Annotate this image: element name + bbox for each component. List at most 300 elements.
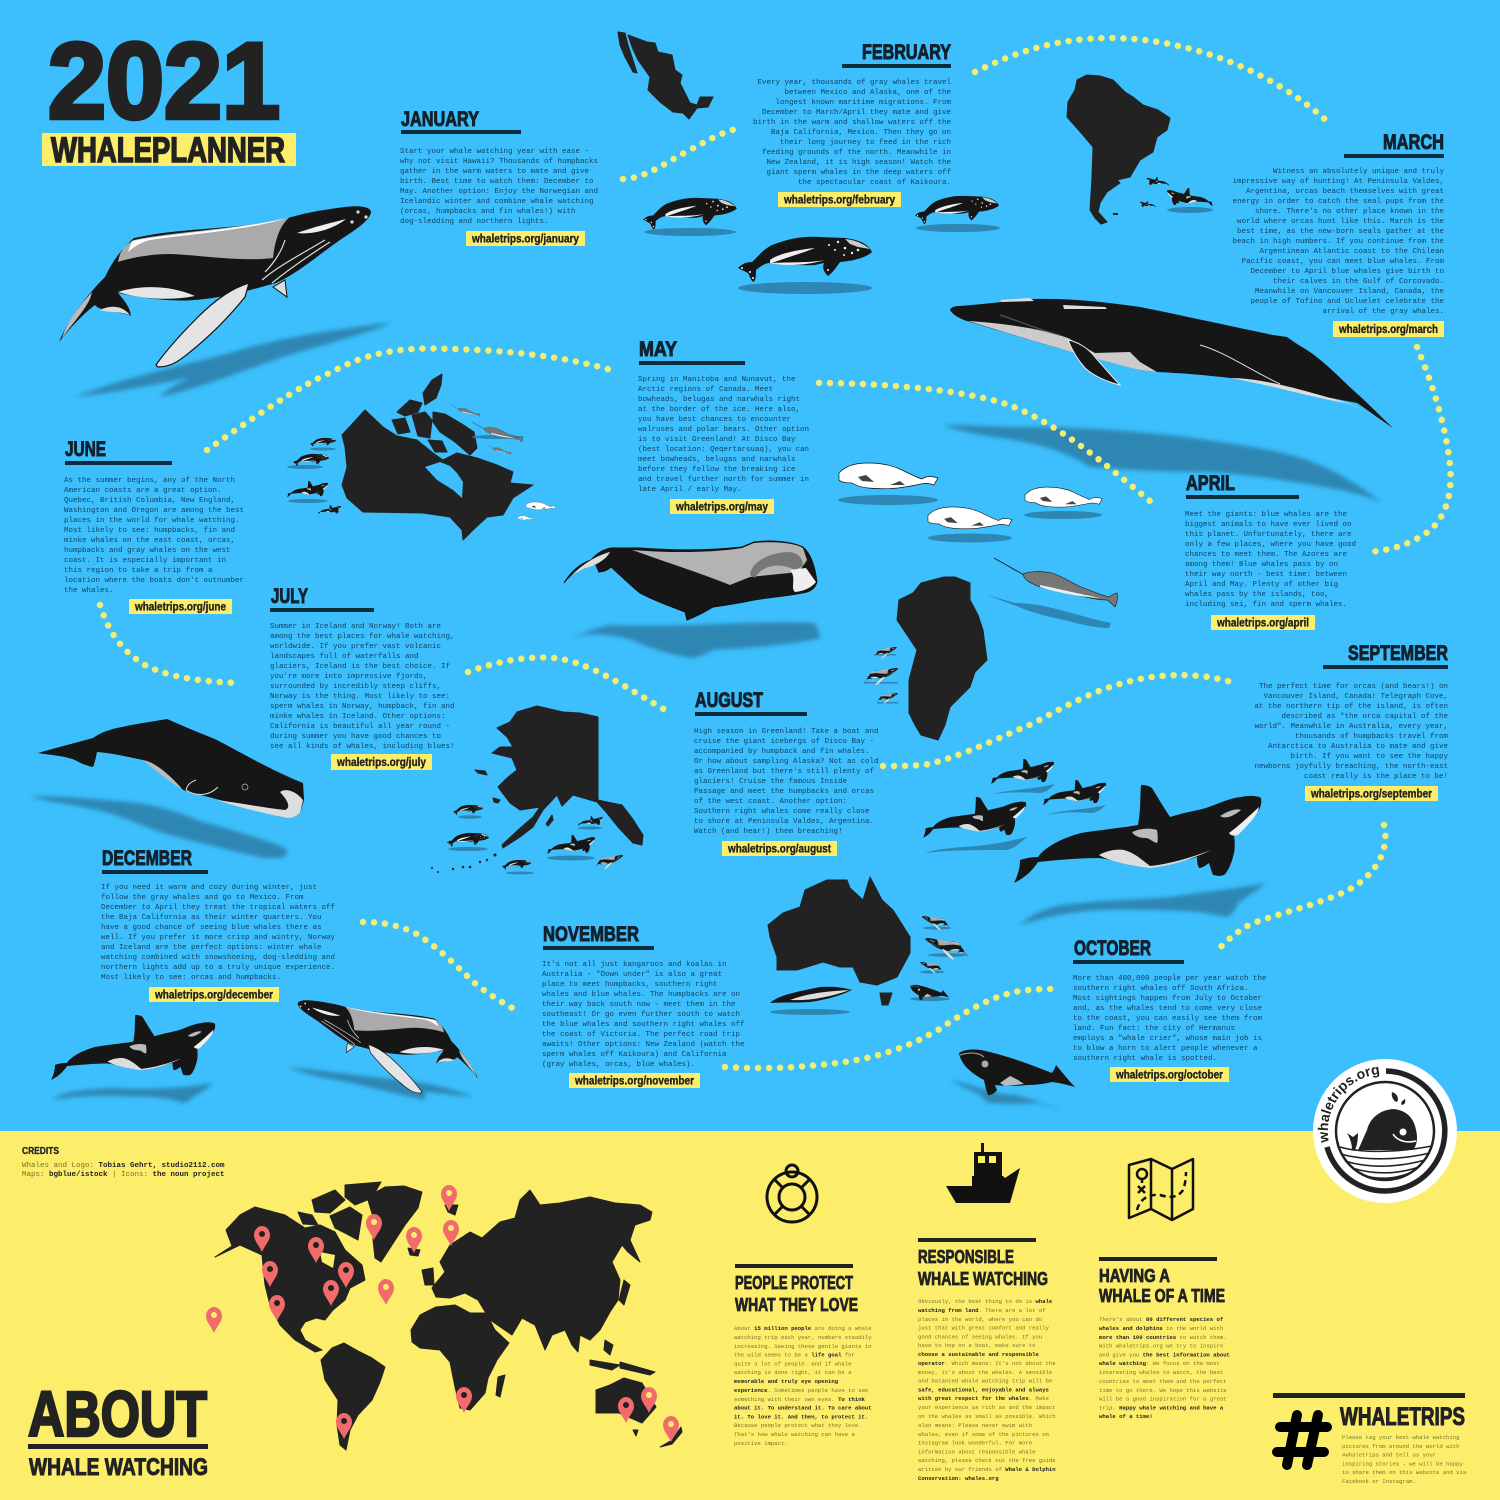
text: February: Baja California, Mexico. Then they go on [771,129,951,137]
body text: interesting whales to watch, the best [1099,1369,1223,1376]
North America [215,1207,365,1352]
text: June: the whales. [64,587,114,595]
map: Canada with whales [287,374,556,540]
text: April: their way north - best time: between [1185,571,1347,579]
text: May [638,376,809,494]
text: September: Antarctica to Australia to mate and give [1268,743,1448,751]
mainland [628,35,713,119]
white disc [1313,1059,1457,1203]
body text: inspiring stories - we will be happy [1342,1460,1463,1468]
small blue whale [770,987,852,1003]
text: September: newborns joyfully breaching, the north-east [1254,763,1448,771]
text: November: whales and blue whales. The humpbacks are on [542,991,740,999]
white jaw [790,568,816,592]
body text: That's how whale watching can have a [734,1431,855,1438]
text: January: gather in the warm waters to mate and give [400,168,589,176]
body text: quite a lot of people. And if whale [734,1360,852,1368]
text: January: Icelandic winter and combine whale watching [400,198,594,206]
text: November: their way back south now - meet them in the [542,1001,736,1009]
shadow [943,425,1383,503]
text: January [400,148,598,226]
gray whale bottom [502,860,531,870]
New Zealand [660,1427,682,1447]
text: February: longest known maritime migrations. From [775,99,951,107]
body text: information about responsible whale [918,1448,1036,1456]
text: December: watching combined with snowshoeing, dog-sledding and [101,954,335,962]
Hudson Bay [425,462,463,498]
text: August: Watch (and hear!) them breaching! [694,828,843,836]
orca small left [991,759,1054,784]
shadow [30,797,287,858]
orca small [1147,177,1169,186]
heading: November: NOVEMBER [543,923,639,946]
text: October: More than 400,000 people per year watch the [1073,975,1267,983]
humpback 2 [864,668,898,686]
body text: money, it's about the whales. A sensible [918,1369,1052,1376]
body text: Because people protect what they love. [734,1422,862,1429]
link: April: whaletrips.org/april [1216,618,1309,630]
link: March [1333,321,1444,337]
link: December: whaletrips.org/december [154,990,273,1002]
text: February: the spectacular coast of Kaikoura. [798,179,951,187]
body text: #whaletrips and tell us your [1342,1452,1436,1458]
curved logo text: whaletrips.org [1318,1066,1380,1143]
Iceland [408,1248,420,1256]
mainland [768,877,910,985]
text: May: (best location: Qeqertarsuaq), you can [638,446,809,454]
heading: February: FEBRUARY [862,41,951,64]
Svalbard [445,1205,458,1215]
text: August: glaciers! Cruise the famous Inside [694,778,847,786]
text: February: Every year, thousands of gray whales travel [757,79,951,87]
body text: to share them on this website and via [1342,1469,1467,1476]
text: April: Meet the giants: blue whales are the [1185,511,1347,519]
shadows [1020,883,1266,925]
heading: October: OCTOBER [1074,937,1151,960]
text: February: feeding grounds of the north. Meanwhile in [762,149,951,157]
gray back [632,542,807,585]
text: March: world where orcas hunt like this. March is the [1237,218,1444,226]
subtitle banner background [42,133,296,166]
text: July: Norway is the thing. Most likely to see: [270,693,450,701]
text: May: walruses and polar bears. Other option [638,426,809,434]
body text: watching from land. There are a lot of [918,1307,1046,1314]
text: December: have a good chance of seeing blue whales there as [101,924,322,932]
inner ring [1336,1082,1434,1180]
body text: time to go there. We hope this website [1099,1387,1227,1394]
body text: the wild seems to be a life goal for [734,1352,855,1358]
shadow [75,322,393,397]
panel: October [1073,937,1267,1082]
orca with shadow (December) [51,1015,215,1103]
text: May: is to visit Greenland! At Disco Bay [638,436,796,444]
body text: choose a sustainable and responsible [918,1351,1039,1358]
Eurasia [432,1190,652,1352]
link: October: whaletrips.org/october [1115,1070,1223,1082]
text: February [753,79,951,187]
orca tiny [1140,201,1156,207]
body text: with great respect for the whales. Make [918,1395,1049,1402]
heading [918,1247,1048,1289]
route: March to April [1370,347,1451,552]
whale [959,1049,1075,1095]
southern right whale with shadow (October) [950,1049,1075,1113]
Indonesia and Philippines [590,1340,655,1375]
baleen [750,552,803,578]
text: February: birth in the warm and shallow waters off the [753,119,951,127]
text: March: Argentinean Atlantic coast to the Chilean [1259,248,1444,256]
Australia [596,1378,656,1423]
link: August: whaletrips.org/august [727,844,831,856]
narwhal with shadow (May) [987,558,1117,628]
humpback 1 [874,647,897,659]
text: March: impressive way of hunting! At Peninsula Valdes, [1232,178,1444,186]
Victoria Island [392,418,410,434]
Ellesmere Island [423,374,442,405]
body text: safe, educational, enjoyable and always [918,1386,1050,1394]
text: March: shore. There's no other place known in the [1255,208,1444,216]
text: August: Southern right whales come really close [694,808,870,816]
link: March: whaletrips.org/march [1338,324,1438,336]
body text: will be a good inspiration for a great [1099,1396,1227,1402]
map [897,577,987,740]
whale [59,206,371,367]
text: July: worldwide. If you prefer vast volcanic [270,643,441,651]
whale in logo [1358,1109,1417,1150]
panel: #whaletrips [1273,1393,1467,1485]
humpback small [920,962,943,974]
humpback [595,855,623,870]
text: August [694,728,879,836]
Aleutian chain [431,854,496,873]
panel: March [1232,131,1444,337]
text: July: surrounded by incredibly steep cliffs, [270,683,441,691]
link: November: whaletrips.org/november [574,1076,694,1088]
body text: Facebook or Instagram. [1342,1478,1416,1485]
body text: Obviously, the best thing to do is whale [918,1298,1053,1305]
credits text: Maps: bgblue/istock | Icons: the noun project [22,1171,225,1179]
text: August: as Greenland but there's still plenty of [694,768,875,776]
route: November to December [363,922,516,1010]
yellow about section background [0,1131,1500,1500]
Tasmania [633,1430,638,1436]
text: November: sperm whales off Kaikoura) and California [542,1051,727,1059]
text: February: their long journey to feed in the rich [780,139,951,147]
narwhal tiny [487,445,511,455]
body text: your experience as rich as and the impact [918,1404,1056,1411]
body text: on the whales as small as possible. Which [918,1413,1056,1420]
orca medium [923,797,1026,838]
text: February: December to March/April they mate and give [762,109,951,117]
text: November [542,961,745,1069]
orca large [1167,188,1213,206]
subheading: Whale Watching: WHALE WATCHING [29,1454,208,1481]
Madagascar [496,1375,505,1397]
text: April: among them! Blue whales pass by on [1185,561,1338,569]
route: February to March [975,38,1328,122]
Hudson Bay [320,1252,335,1268]
text: May: at the border of the ice. Here also, [638,406,800,414]
blue sea background [0,0,1500,1131]
beluga small [518,516,533,520]
route: May to June [207,348,617,450]
text: December: Most likely to see: orcas and humpbacks. [101,974,281,982]
text: June: Quebec, British Columbia, New England, [64,497,235,505]
text: September: thousands of humpbacks travel from [1295,733,1448,741]
body text [918,1298,1056,1482]
gray whale centre [738,237,872,282]
body text: whales, even if some of the pictures on [918,1431,1049,1438]
Tasmania [880,993,892,1005]
text: March: Pacific coast, you can meet blue whales. From [1241,258,1444,266]
text: August: cruise the giant icebergs of Disco Bay - [694,738,874,746]
text: June: American coasts are a great option. [64,487,222,495]
text: September: coast really is the place to be! [1304,773,1448,781]
text: October: southern right whales off South Africa. [1073,985,1249,993]
text: September: Vancouver Island, Canada! Telegraph Cove, [1263,693,1448,701]
heading: December: DECEMBER [102,847,192,870]
icon: hash [1277,1415,1327,1465]
panel: April [1185,472,1356,630]
text: December: the Baja California as their winter quarters. You [101,914,322,922]
body text: more than 100 countries to watch them. [1099,1334,1227,1341]
map: Alaska with whales [431,706,643,874]
text: April: including sei, fin and sperm whales. [1185,601,1347,609]
text: May: and travel further north for summer in [638,476,809,484]
heading: March: MARCH [1383,131,1444,154]
map: South America with orcas [1067,75,1213,224]
text: September: birth. If you want to see the happy [1290,753,1448,761]
text: March: beach in high numbers. If you continue from the [1232,238,1444,246]
body text: have to hop on a boat, make sure to [918,1342,1036,1349]
route: July to August [468,658,667,711]
text: December: northern lights add up to a truly unique experience. [101,964,335,972]
heading: May: MAY [639,338,677,361]
text: May: bowheads, belugas and narwhals right [638,396,800,404]
text: July: sperm whales in Norway, humpback, fin and [270,703,455,711]
text: October: to blow a horn to alert people whenever a [1073,1045,1258,1053]
subtitle: Whaleplanner: WHALEPLANNER [51,131,285,170]
text: July: among the best places for whale watching, [270,633,455,641]
Africa [411,1305,509,1410]
text: December [101,884,336,982]
gray whale right [915,196,999,224]
heading [1099,1266,1225,1306]
orca [287,481,328,497]
text: September: The perfect time for orcas (and bears!) on [1259,683,1448,691]
text: July [270,623,455,751]
text: August: Or how about sampling Alaska? Not as cold [694,758,879,766]
British Isles [422,1268,434,1285]
dotted route lines between months [100,38,1451,1068]
text: March: arrival of the gray whales. [1322,308,1444,316]
text: January: May. Another option: Enjoy the Norwegian and [400,188,598,196]
text: January: dog-sledding and northern lights. [400,218,549,226]
link: May: whaletrips.org/may [675,502,769,514]
text: May: Arctic regions of Canada. Meet [638,386,773,394]
map [1067,75,1170,224]
whale body [564,541,817,620]
text: October: to the coast, you can easily see them from [1073,1015,1263,1023]
text: April: chances to meet them. The Azores are [1185,551,1347,559]
icon: lifebuoy [767,1165,817,1222]
body text: watching trip each year, numbers steadily [734,1334,872,1341]
world map with pins [206,1182,682,1450]
text: March: Witness an absolutely unique and truly [1273,168,1444,176]
smaller arctic islands [412,412,447,452]
route: April to May [819,383,1156,506]
whale body [38,719,304,818]
mainland [492,706,643,848]
heading: RESPONSIBLE [918,1247,1014,1267]
text: November: awaits! Other options: New Zealand (watch the [542,1041,745,1049]
body text: and balanced whale watching trip will be [918,1378,1052,1384]
beluga [526,502,556,510]
water lines [1340,1146,1432,1178]
body text: watching is done right, it can be a [734,1369,852,1376]
text: January: why not visit Hawaii? Thousands of humpbacks [400,158,598,166]
text: September: described as "the orca capital of the [1281,713,1448,721]
orca tiny [578,816,603,826]
humpback [922,916,950,931]
humpback with shadow (December) [288,1000,478,1100]
heading: WHALE WATCHING [918,1269,1048,1289]
route: January to February [623,129,736,179]
text: March: people of Tofino and Ucluelet celebrate the [1250,298,1444,306]
panel: September [1254,642,1448,801]
link: January: whaletrips.org/january [471,234,580,246]
spout [1392,1092,1405,1105]
panel: January [400,108,598,246]
body text: written by our friends of Whale & Dolphin [918,1466,1056,1473]
text: December: December to April they treat the tropical waters off [101,904,336,912]
bowhead whale with shadow (May) [564,541,821,658]
text: March: Argentina, orcas beach themselves with great [1246,188,1444,196]
text: February: between Mexico and Alaska, one of the [784,89,951,97]
body text: it. To love it. And then, to protect it. [734,1414,868,1420]
text: January: birth. Best time to watch them: December to [400,178,594,186]
Devon Island [397,400,422,416]
humpback [298,1000,478,1093]
blue whale with shadow (April) [943,298,1393,503]
outer ring arc [1327,1071,1445,1191]
text: November: (gray whales, orcas, blue whales). [542,1061,695,1069]
body text: about it. To understand it. To care about [734,1404,872,1412]
throat grooves [1000,315,1060,335]
route: June to July [100,605,240,683]
tail underside [1230,378,1393,428]
body text: positive impact. [734,1440,788,1447]
text: November: the coast of Victoria. The perfect road trip [542,1031,740,1039]
text: February: giant sperm whales in the deep waters off [766,169,951,177]
body text: operator. Which means: It's not about the [918,1360,1056,1367]
text: September: world". Meanwhile in Australia, every year, [1254,723,1448,731]
text: June: humpbacks and gray whales on the west [64,547,231,555]
text: July: you're more into impressive fjords, [270,673,428,681]
text: May: meet bowheads, belugas and narwhals [638,456,796,464]
narwhal small [451,405,480,417]
gray whale small [310,438,336,447]
text: October: Most sightings happen from July to October [1073,995,1262,1003]
heading: September: SEPTEMBER [1348,642,1448,665]
heading: WHALE OF A TIME [1099,1286,1225,1306]
credits [22,1146,225,1179]
white lower jaw [217,790,303,818]
panel: February [753,41,951,207]
heading: HAVING A [1099,1266,1170,1286]
map pins [206,1185,679,1442]
text: July: minke whales in Iceland. Other options: [270,713,446,721]
text: September: at the northern tip of the island, is often [1254,703,1448,711]
text: July: see all kinds of whales, including blues! [270,743,455,751]
text: May: Spring in Manitoba and Nunavut, the [638,376,796,384]
text: October: southern right whale is spotted. [1073,1055,1217,1063]
body text: memorable and truly eye opening [734,1378,839,1385]
text: March: Meanwhile on Vancouver Island, Canada, the [1255,288,1444,296]
Baja California [618,32,637,73]
body text: watching, please check out the free guide [918,1457,1056,1464]
link: February: whaletrips.org/february [783,194,896,206]
whale body [950,299,1393,428]
logo: whaletrips.org badge [1313,1059,1457,1203]
orca [51,1015,215,1080]
text: November: the blue whales and southern right whales off [542,1021,745,1029]
body text: good chances of seeing whales. If you [918,1334,1042,1340]
text: April: only a few places, where you have good [1185,541,1356,549]
text: January: (orcas, humpbacks and fin whales!) with [400,208,576,216]
text: June: location where the boats don't outnumber [64,577,244,585]
text: June [64,477,244,595]
text: June: minke whales on the east coast, orcas, [64,537,235,545]
text: November: place to meet humpbacks, southern right [542,981,718,989]
text: October: land. Fun fact: the city of Hermanus [1073,1025,1235,1033]
map: Australia with whales [768,877,968,1015]
Japan [619,1280,630,1305]
orca small right [1043,780,1106,805]
text: May: you have best chances to encounter [638,416,791,424]
text: March: their calves in the Gulf of Corcovado. [1273,278,1444,286]
route: September to October [1215,825,1385,953]
heading: April: APRIL [1186,472,1235,495]
eye [1400,1128,1406,1136]
body text: whale of a time! [1099,1413,1153,1420]
islands [475,770,553,826]
route: October to November [725,989,1051,1068]
text: October [1073,975,1267,1063]
beluga 1 [839,463,938,489]
sperm whale with shadow (July) [30,719,304,858]
body text: With whaletrips.org we try to inspire [1099,1342,1223,1350]
text: April: whales pass by the islands, too, [1185,591,1329,599]
body text: countries to meet them and the perfect [1099,1378,1227,1385]
text: September [1254,683,1448,781]
heading: PEOPLE PROTECT [735,1273,853,1293]
panel: May [638,338,809,514]
text: August: to shore at Peninsula Valdes, Argentina. [694,818,874,826]
text: April: biggest animals to have ever lived on [1185,521,1352,529]
orca [547,835,595,854]
body text [1342,1434,1467,1485]
narwhal [994,558,1117,607]
text: May: late April / early May. [638,486,742,494]
title: 2021: 2021 [48,20,280,141]
text: March: December to April blue whales give birth to [1250,268,1444,276]
tail [1347,1133,1358,1150]
southern right whale [910,985,949,1000]
body text: whale watching: We focus on the most [1099,1360,1220,1367]
about heading [28,1378,208,1481]
panel: August [694,689,879,856]
